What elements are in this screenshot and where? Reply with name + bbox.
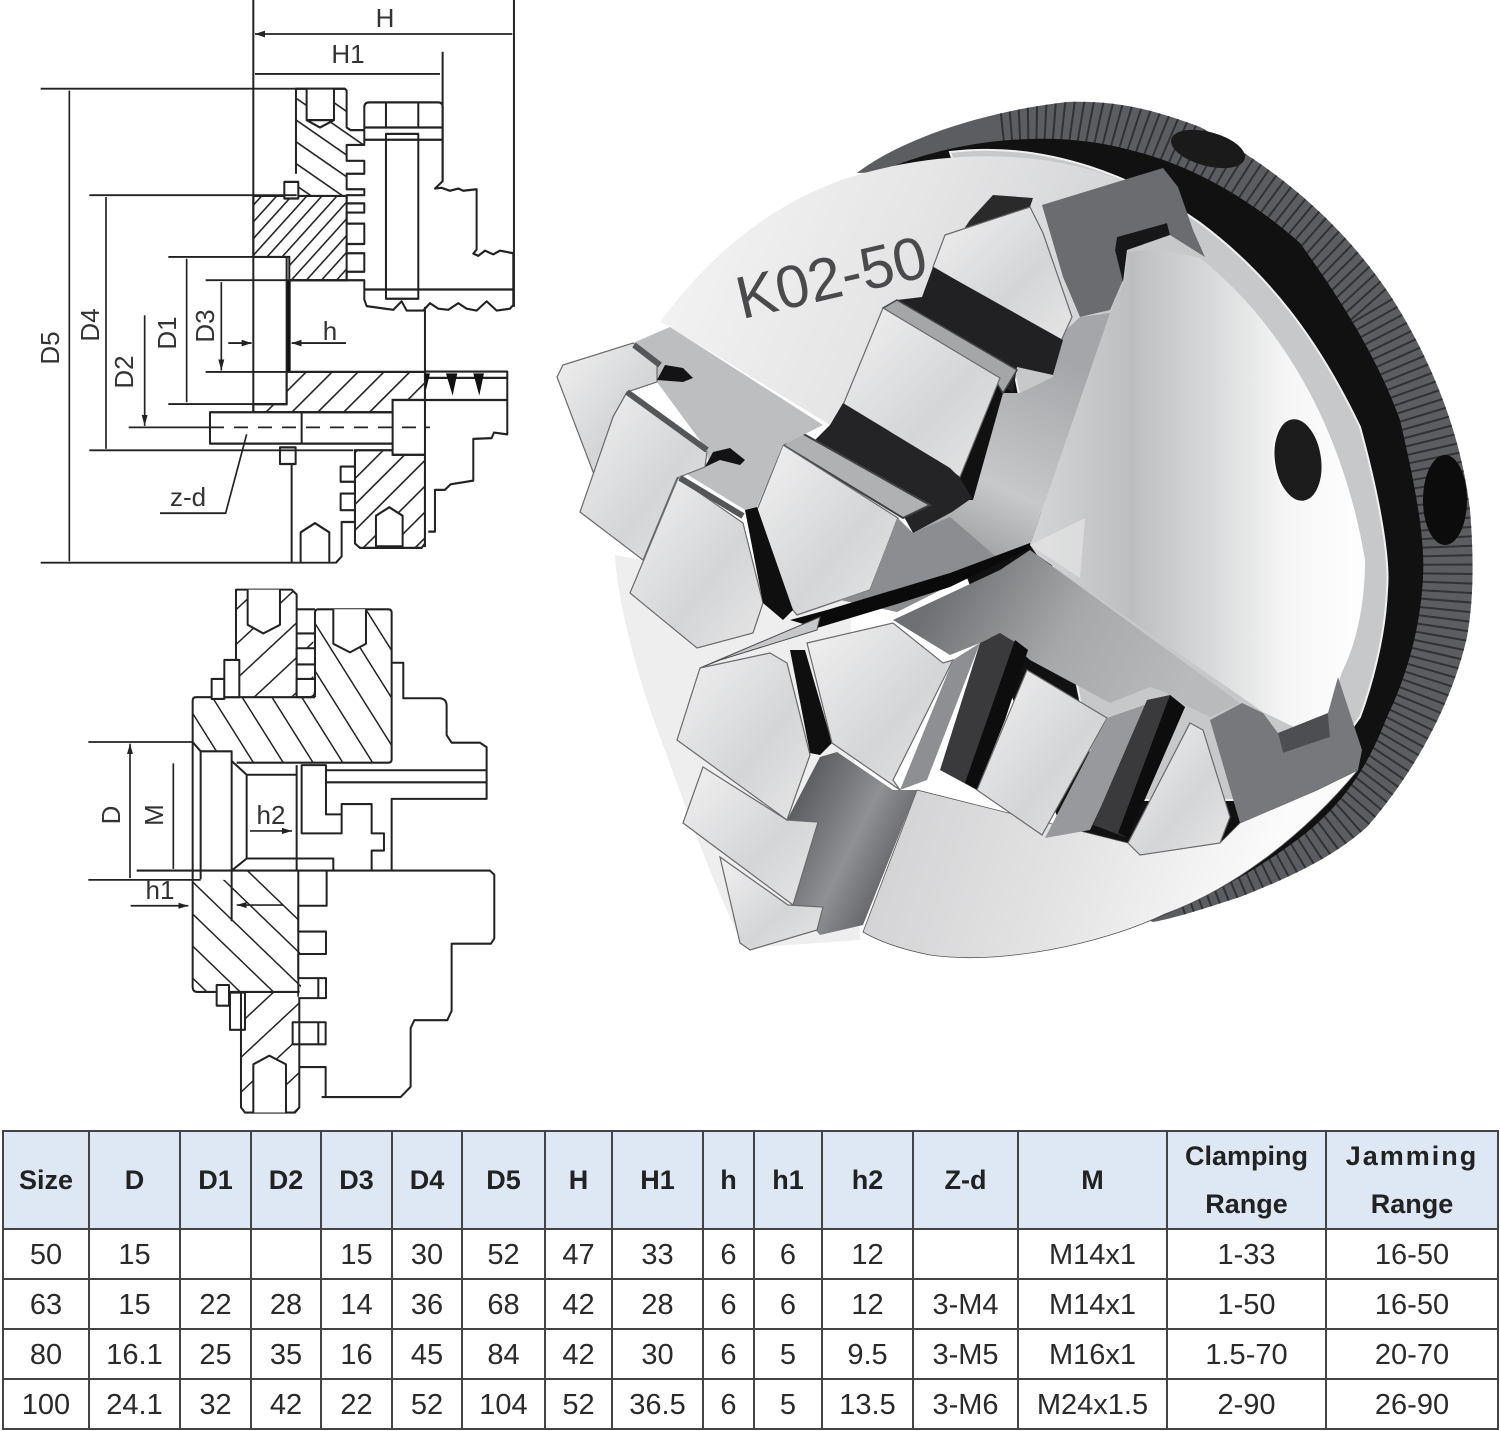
table header row: Size <box>19 1165 73 1195</box>
top jaw behind hole <box>962 195 1033 232</box>
table row: size 50: 33 <box>641 1239 674 1271</box>
centre line <box>210 425 430 430</box>
left arm <box>633 327 823 510</box>
hatched lower block <box>193 871 313 993</box>
table row: size 63: 28 <box>641 1289 674 1321</box>
dimension lines <box>88 742 292 906</box>
table row: size 100: M24x1.5 <box>1037 1389 1148 1421</box>
table row: size 63: 28 <box>270 1289 302 1321</box>
table row: size 100: 104 <box>479 1389 528 1421</box>
table row: size 63: 1-50 <box>1217 1289 1276 1321</box>
table row: size 50: 50 <box>30 1239 62 1271</box>
centre black gap <box>790 543 1030 628</box>
table header row: Range <box>1371 1189 1453 1219</box>
dimension labels: front section: D4 <box>75 308 105 342</box>
centre cone highlight <box>1030 518 1085 578</box>
table row: size 63: 63 <box>30 1289 62 1321</box>
table row: size 80: 80 <box>30 1339 62 1371</box>
lower left arm <box>787 752 917 935</box>
dimension labels: front section: H <box>376 3 394 33</box>
table header row: h <box>720 1165 737 1195</box>
table row: size 80: 84 <box>487 1339 520 1371</box>
table row: size 63 <box>30 1289 1449 1321</box>
table header row: D <box>125 1165 144 1195</box>
drawing outlines <box>210 0 514 563</box>
table row: size 50: 30 <box>411 1239 443 1271</box>
top arm <box>870 313 1110 612</box>
table row: size 63: 14 <box>340 1289 373 1321</box>
lower right carrier block <box>1210 677 1362 823</box>
left jaw slots <box>657 365 745 467</box>
table header row: h2 <box>852 1165 883 1195</box>
table row: size 100: 3-M6 <box>932 1389 999 1421</box>
table header row: Z-d <box>944 1165 986 1195</box>
silver body upper <box>660 156 1125 425</box>
silver flange rim <box>950 150 1388 800</box>
chuck mounting hole <box>1268 415 1328 505</box>
table row: size 100: 6 <box>720 1389 737 1421</box>
drawing outlines <box>137 590 494 1113</box>
table row: size 80: 25 <box>199 1339 232 1371</box>
table row: size 50: 12 <box>851 1239 884 1271</box>
table row: size 50 <box>30 1239 1449 1271</box>
table header row: H <box>569 1165 588 1195</box>
table row: size 63: 6 <box>780 1289 796 1321</box>
ring side hole <box>1423 455 1467 545</box>
table row: size 50: M14x1 <box>1049 1239 1136 1271</box>
hatched upper ring section <box>253 89 364 196</box>
dimension labels: front section: D1 <box>152 316 182 350</box>
dimension labels: front section <box>35 3 394 512</box>
hatched middle block <box>193 609 392 763</box>
table row: size 63: M14x1 <box>1049 1289 1136 1321</box>
dimension labels: front section: h <box>323 316 337 346</box>
table row: size 100: 52 <box>411 1389 443 1421</box>
lower right notch <box>1278 713 1330 753</box>
table row: size 50: 15 <box>118 1239 151 1271</box>
table row: size 100: 36.5 <box>629 1389 686 1421</box>
silver body lower <box>863 770 1358 958</box>
table row: size 80: 9.5 <box>847 1339 888 1371</box>
dimension labels: rear section: M <box>139 804 169 826</box>
table row: size 63: 42 <box>562 1289 595 1321</box>
hatched lower ring section <box>355 450 425 548</box>
dimension labels: front section: D2 <box>109 355 139 389</box>
table row: size 100: 2-90 <box>1217 1389 1276 1421</box>
knurled outer ring <box>857 102 1473 922</box>
centre side piece <box>840 517 1000 612</box>
table row: size 100: 42 <box>270 1389 302 1421</box>
photo: K02-50 lathe chuck <box>557 102 1473 958</box>
dimension lines <box>41 34 512 563</box>
table row: size 80: 35 <box>270 1339 302 1371</box>
black gap lower <box>790 650 832 755</box>
dimension labels: front section: z-d <box>170 482 206 512</box>
table row: size 80: 1.5-70 <box>1205 1339 1288 1371</box>
hatched upper ring <box>236 590 313 697</box>
lower right jaws and grooves <box>807 623 1230 855</box>
thick bore line <box>284 280 294 372</box>
centre sliver <box>700 617 820 668</box>
table header row: Clamping <box>1185 1141 1308 1171</box>
table header row: D5 <box>486 1165 521 1195</box>
table row: size 63: 15 <box>118 1289 151 1321</box>
lower right arm <box>893 550 1240 717</box>
table row: size 50: 52 <box>487 1239 520 1271</box>
table row: size 63: 16-50 <box>1375 1289 1449 1321</box>
table row: size 80: 45 <box>411 1339 443 1371</box>
table row: size 80: 6 <box>720 1339 737 1371</box>
table row: size 80: M16x1 <box>1049 1339 1136 1371</box>
specification table <box>2 1130 1499 1430</box>
hatched lower ring <box>241 993 299 1113</box>
table row: size 63: 22 <box>199 1289 232 1321</box>
table row: size 50: 16-50 <box>1375 1239 1449 1271</box>
black inner band <box>880 139 1423 930</box>
table row: size 80 <box>30 1339 1449 1371</box>
table header row: Range <box>1205 1189 1288 1219</box>
dimension labels: rear section <box>96 800 285 905</box>
diagram: rear chuck cross-section with dimensions <box>88 590 494 1113</box>
left jaw steps <box>557 343 763 648</box>
table header row: D2 <box>269 1165 303 1195</box>
table row: size 100: 100 <box>22 1389 70 1421</box>
table row: size 80: 16 <box>340 1339 373 1371</box>
table row: size 100: 5 <box>780 1389 796 1421</box>
table row: size 63: 12 <box>851 1289 884 1321</box>
table header row: M <box>1081 1165 1104 1195</box>
engraved model label: K02-50 <box>730 223 933 332</box>
table row: size 100: 52 <box>562 1389 595 1421</box>
table row: size 100: 22 <box>340 1389 373 1421</box>
table header row <box>4 1132 1497 1421</box>
table row: size 100: 13.5 <box>839 1389 896 1421</box>
diagram: front chuck cross-section with dimensions <box>41 0 514 563</box>
table header row: D1 <box>198 1165 233 1195</box>
table row: size 100: 24.1 <box>106 1389 163 1421</box>
dimension labels: front section: D3 <box>190 309 220 343</box>
table row: size 100: 26-90 <box>1375 1389 1449 1421</box>
black gap left <box>745 507 793 620</box>
top jaw steps <box>757 207 1072 615</box>
dimension labels: rear section: D <box>96 806 126 824</box>
dimension labels: rear section: h1 <box>146 875 174 905</box>
table row: size 80: 5 <box>780 1339 796 1371</box>
table header row: D3 <box>339 1165 374 1195</box>
table row: size 100: 32 <box>199 1389 232 1421</box>
table row: size 50: 6 <box>720 1239 737 1271</box>
table row: size 100 <box>22 1389 1449 1421</box>
table row: size 50: 1-33 <box>1217 1239 1276 1271</box>
top carrier dark side <box>1042 168 1205 317</box>
table row: size 50: 47 <box>562 1239 595 1271</box>
table row: size 80: 30 <box>641 1339 674 1371</box>
dimension labels: front section: D5 <box>35 331 65 365</box>
table row: size 50: 15 <box>340 1239 373 1271</box>
table header row: Jamming <box>1346 1141 1478 1171</box>
thread wedges <box>425 373 484 396</box>
right body sector <box>1030 250 1365 730</box>
table row: size 63: 68 <box>487 1289 520 1321</box>
table row: size 63: 3-M4 <box>932 1289 999 1321</box>
dimension labels: front section: H1 <box>331 39 365 69</box>
table header row: h1 <box>772 1165 804 1195</box>
table row: size 63: 36 <box>411 1289 443 1321</box>
table row: size 80: 42 <box>562 1339 595 1371</box>
silver body left edge <box>615 555 860 948</box>
top carrier slot <box>1115 223 1170 282</box>
ring top slot <box>1167 123 1249 175</box>
table row: size 80: 20-70 <box>1375 1339 1449 1371</box>
table row: size 80: 3-M5 <box>932 1339 999 1371</box>
lower left jaws <box>677 653 823 950</box>
table header row: D4 <box>410 1165 444 1195</box>
hatched body block <box>253 196 347 280</box>
hatched lower hub section <box>253 372 425 412</box>
table row: size 50: 6 <box>780 1239 796 1271</box>
dimension labels: rear section: h2 <box>257 800 285 830</box>
table header row: H1 <box>640 1165 675 1195</box>
table row: size 63: 6 <box>720 1289 737 1321</box>
table row: size 80: 16.1 <box>106 1339 163 1371</box>
